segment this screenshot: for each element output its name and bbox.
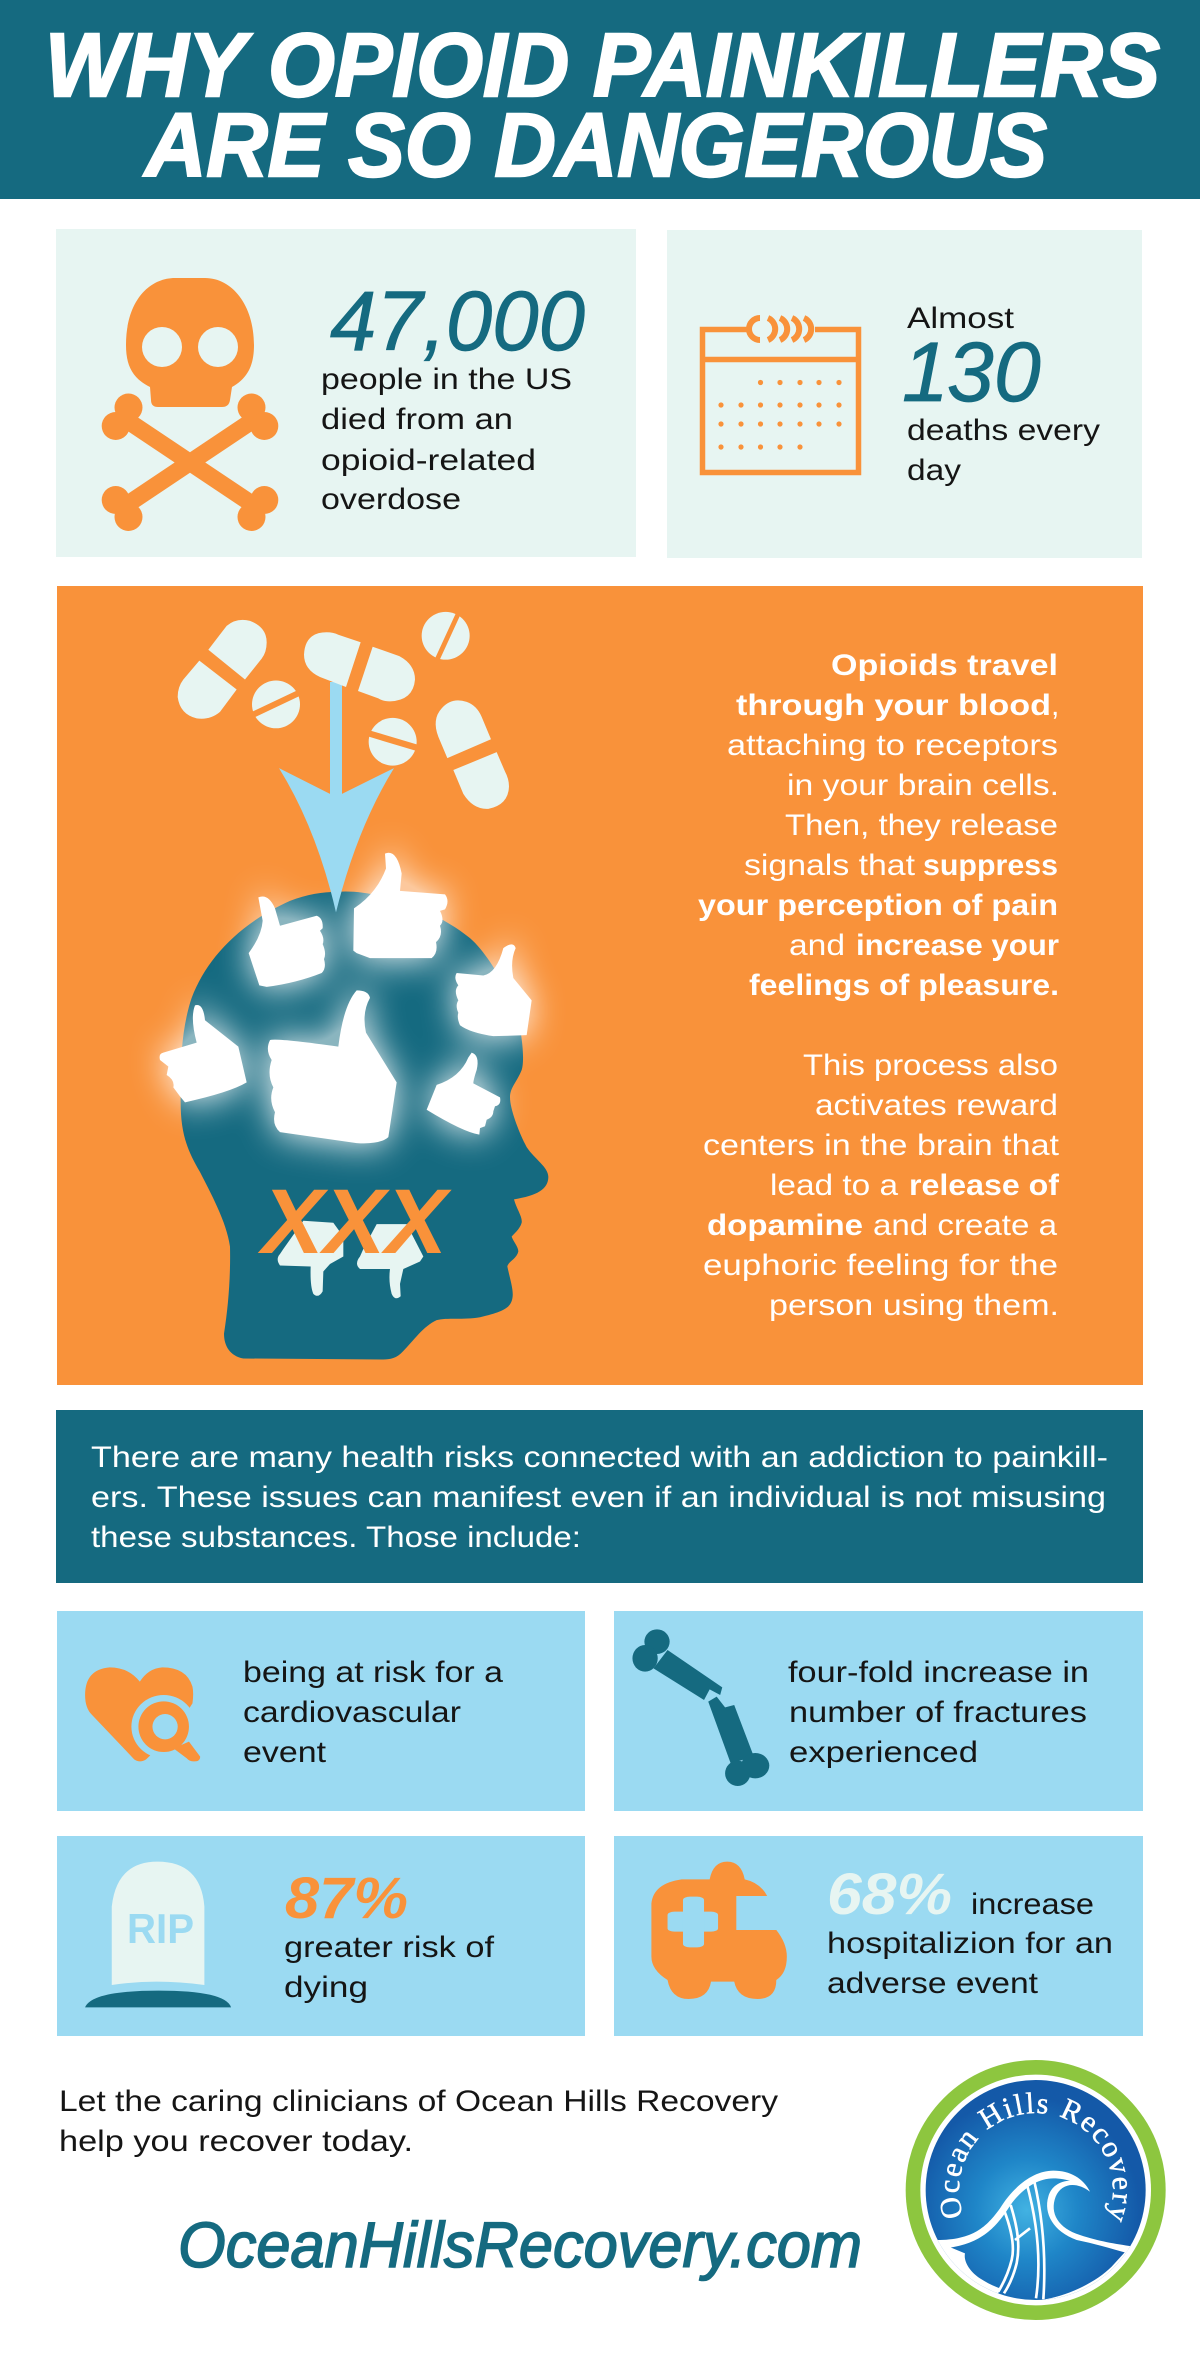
stat: 87%: 87% bbox=[285, 1866, 408, 1931]
title bbox=[45, 16, 1160, 196]
icon: tombstone: RIP bbox=[127, 1905, 194, 1952]
text: greater risk of dying bbox=[284, 1931, 495, 2004]
icon: broken bone bbox=[632, 1629, 769, 1786]
text: health risks intro: There are many health risks connected with an addiction to painkill- bbox=[91, 1441, 1108, 1474]
logo: Ocean Hills Recovery: Ocean Hills Recovery bbox=[940, 2092, 1128, 2223]
text: almost: Almost bbox=[907, 302, 1015, 335]
text: health risks intro: these substances. Those include: bbox=[91, 1521, 581, 1554]
panel: 47,000 deaths bbox=[56, 229, 636, 557]
text: reward centers: dopamine bbox=[707, 1209, 863, 1242]
text: greater risk of dying: dying bbox=[284, 1971, 368, 2004]
text: people in the US died: died from an bbox=[321, 403, 513, 436]
text: at risk: being at risk for a bbox=[243, 1656, 503, 1689]
text: call to action: help you recover today. bbox=[59, 2125, 413, 2158]
text: at risk bbox=[243, 1656, 503, 1769]
text: four-fold increase: number of fractures bbox=[789, 1696, 1087, 1729]
icon: head silhouette bbox=[181, 891, 548, 1359]
icon: thumbs up bbox=[160, 853, 532, 1143]
text: opioids travel: signals that bbox=[744, 849, 916, 882]
icon: arrow down bbox=[279, 682, 394, 912]
text: opioids travel: Opioids travel bbox=[831, 649, 1058, 682]
text: people in the US died bbox=[321, 363, 572, 516]
text: opioids travel: , bbox=[1051, 689, 1059, 722]
logo ring text bbox=[959, 2113, 1113, 2225]
text: reward centers: centers in the brain that bbox=[703, 1129, 1060, 1162]
icon: tombstone bbox=[85, 1862, 231, 2007]
title: WHY OPIOID PAINKILLERS bbox=[45, 16, 1160, 116]
text: increase hospitalizion: adverse event bbox=[827, 1967, 1039, 2000]
text: increase hospitalizion: hospitalizion for an bbox=[827, 1927, 1113, 1960]
illustration: pills falling into head bbox=[160, 610, 548, 1359]
icon: calendar bbox=[702, 318, 858, 472]
text: reward centers: euphoric feeling for the bbox=[703, 1249, 1058, 1282]
text: increase hospitalizion bbox=[827, 1888, 1113, 2000]
header band bbox=[0, 0, 1200, 199]
text: opioids travel: and bbox=[789, 929, 845, 962]
panel: how opioids work bbox=[57, 586, 1143, 1385]
text: at risk: cardiovascular bbox=[243, 1696, 461, 1729]
text: opioids travel bbox=[698, 649, 1059, 1002]
text: four-fold increase: experienced bbox=[789, 1736, 978, 1769]
text: opioids travel: Then, they release bbox=[785, 809, 1058, 842]
stat: 68%: 68% bbox=[827, 1862, 952, 1927]
text: call to action: Let the caring clinicians of Ocean Hills Recovery bbox=[59, 2085, 778, 2118]
text: deaths every day bbox=[907, 414, 1100, 487]
card: fractures bbox=[614, 1611, 1143, 1811]
text: reward centers: activates reward bbox=[815, 1089, 1058, 1122]
text: opioids travel: increase your bbox=[856, 929, 1059, 962]
text: reward centers: and create a bbox=[873, 1209, 1057, 1242]
crossed out marks: XXX bbox=[257, 1171, 452, 1273]
text: reward centers: release of bbox=[909, 1169, 1060, 1202]
glow behind thumbs bbox=[160, 853, 532, 1143]
icon: heart with magnifier bbox=[85, 1667, 200, 1761]
text: call to action bbox=[59, 2085, 778, 2158]
icon: thumbs down bbox=[278, 1221, 423, 1298]
card: hospitalization bbox=[614, 1836, 1143, 2036]
text: opioids travel: through your blood bbox=[736, 689, 1051, 722]
text: opioids travel: your perception of pain bbox=[698, 889, 1058, 922]
text: four-fold increase: four-fold increase in bbox=[788, 1656, 1089, 1689]
text: reward centers bbox=[703, 1049, 1060, 1322]
logo: Ocean Hills Recovery bbox=[906, 2060, 1166, 2320]
text: deaths every day: deaths every bbox=[907, 414, 1100, 447]
text: reward centers: This process also bbox=[803, 1049, 1058, 1082]
text: at risk: event bbox=[243, 1736, 327, 1769]
panel: health risks intro bbox=[56, 1410, 1143, 1583]
text: health risks intro bbox=[91, 1441, 1108, 1554]
text: four-fold increase bbox=[788, 1656, 1089, 1769]
text: reward centers: person using them. bbox=[769, 1289, 1059, 1322]
icon: skull and crossbones bbox=[102, 278, 278, 531]
text: opioids travel: attaching to receptors bbox=[727, 729, 1058, 762]
text: opioids travel: in your brain cells. bbox=[787, 769, 1059, 802]
text: people in the US died: overdose bbox=[321, 483, 461, 516]
text: health risks intro: ers. These issues can manifest even if an individual is not misusing bbox=[91, 1481, 1106, 1514]
text: opioids travel: suppress bbox=[923, 849, 1058, 882]
text: greater risk of dying: greater risk of bbox=[284, 1931, 495, 1964]
panel: 130 deaths every day bbox=[667, 230, 1142, 558]
text: reward centers: lead to a bbox=[770, 1169, 898, 1202]
text: people in the US died: opioid-related bbox=[321, 444, 536, 477]
card: cardiovascular event bbox=[57, 1611, 585, 1811]
stat: 130: 130 bbox=[902, 325, 1041, 419]
website url: OceanHillsRecovery.com bbox=[178, 2209, 862, 2281]
title: ARE SO DANGEROUS bbox=[143, 96, 1047, 196]
icon: ambulance bbox=[651, 1862, 787, 1999]
card: risk of dying bbox=[57, 1836, 585, 2036]
text: people in the US died: people in the US bbox=[321, 363, 572, 396]
text: opioids travel: feelings of pleasure. bbox=[749, 969, 1059, 1002]
icon: pills bbox=[178, 610, 509, 809]
stat: 47,000: 47,000 bbox=[330, 274, 585, 368]
text: deaths every day: day bbox=[907, 454, 961, 487]
text: increase hospitalizion: increase bbox=[971, 1888, 1094, 1921]
